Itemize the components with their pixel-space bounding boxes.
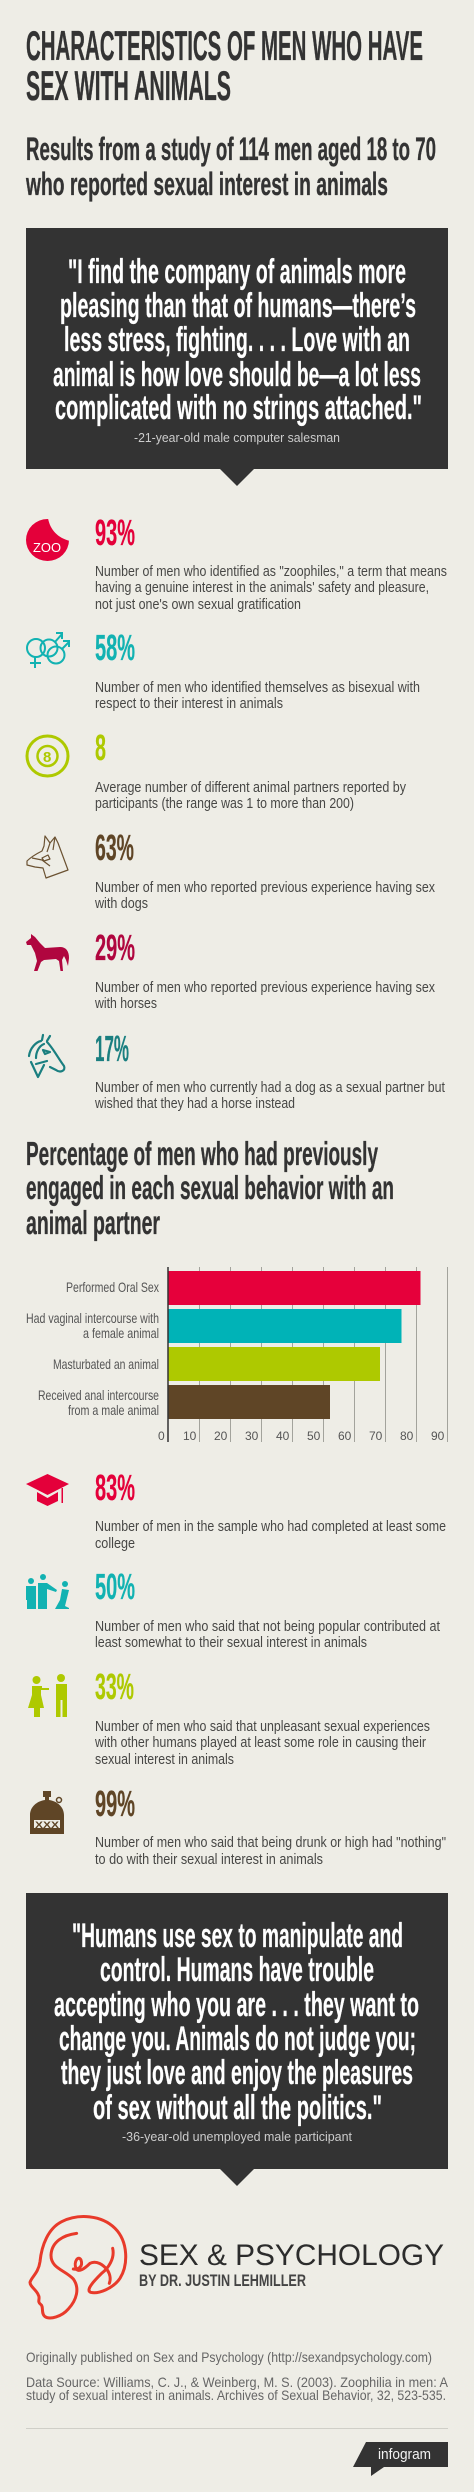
icon: dog head xyxy=(27,836,68,878)
stat: 33% unpleasant experiences: with other humans played at least some role in causing their xyxy=(94,1735,426,1751)
axis labels: 50 xyxy=(307,1429,321,1443)
icon: eight ball: 8 xyxy=(43,749,51,766)
heading: sexual behavior chart xyxy=(26,1135,394,1241)
bar: masturbated xyxy=(168,1347,380,1381)
axis labels: 10 xyxy=(183,1429,197,1443)
stat: 63% dogs xyxy=(27,827,436,912)
icon: eight ball xyxy=(27,736,68,776)
stat: 93% zoophiles: 93% xyxy=(95,512,135,553)
stat: 29% horses: with horses xyxy=(94,996,157,1012)
stat: 8 animal partners: participants (the range was 1 to more than 200) xyxy=(95,796,354,812)
axis labels: 20 xyxy=(214,1429,228,1443)
stat: 63% dogs: 63% xyxy=(95,827,134,868)
icon: moonshine jug: XXX xyxy=(35,1820,60,1831)
icon: moonshine jug xyxy=(30,1791,64,1834)
stat: 17% horse preference xyxy=(29,1028,445,1112)
icon: zoo badge: ZOO xyxy=(33,540,61,555)
stat: 50% not popular: least somewhat to their sexual interest in animals xyxy=(95,1635,367,1651)
category labels: Received anal intercourse xyxy=(38,1387,159,1403)
stat: 58% bisexual: Number of men who identified themselves as bisexual with xyxy=(95,680,420,696)
infogram badge xyxy=(353,2442,448,2476)
stat: 83% college: 83% xyxy=(95,1467,135,1508)
stat: 50% not popular: 50% xyxy=(95,1566,135,1607)
stat: 50% not popular xyxy=(26,1566,440,1651)
category labels xyxy=(26,1279,159,1418)
stat: 33% unpleasant experiences: sexual interest in animals xyxy=(95,1752,234,1768)
logo: Sex & Psychology xyxy=(30,2217,444,2318)
stat: 8 animal partners: 8 xyxy=(95,727,106,768)
stat: 58% bisexual xyxy=(27,627,420,712)
title xyxy=(26,22,423,109)
bar: performed oral sex xyxy=(168,1271,420,1305)
bar: vaginal intercourse xyxy=(168,1309,402,1343)
axis labels: 60 xyxy=(338,1429,352,1443)
category labels: a female animal xyxy=(83,1325,159,1341)
icon: gender symbols xyxy=(27,633,69,668)
axis labels: 30 xyxy=(245,1429,259,1443)
icon: people pointing xyxy=(26,1574,69,1609)
bar: anal intercourse xyxy=(168,1385,330,1419)
icon: horse head xyxy=(29,1035,64,1077)
category labels: Had vaginal intercourse with xyxy=(26,1310,159,1326)
stat: 83% college: college xyxy=(95,1536,135,1552)
bar chart xyxy=(26,1267,448,1443)
stat: 29% horses xyxy=(26,927,436,1012)
stat: 33% unpleasant experiences: 33% xyxy=(95,1666,134,1707)
icon: graduation cap xyxy=(26,1474,69,1506)
title: SEX WITH ANIMALS xyxy=(26,62,231,109)
stat: 29% horses: 29% xyxy=(95,927,135,968)
callout: second quote xyxy=(26,1893,448,2186)
stat: 99% drunk or high: to do with their sexual interest in animals xyxy=(95,1852,323,1868)
stat: 63% dogs: with dogs xyxy=(94,896,148,912)
icon: head with script xyxy=(30,2217,126,2318)
axis labels: 40 xyxy=(276,1429,290,1443)
stat: 17% horse preference: wished that they had a horse instead xyxy=(94,1096,295,1112)
axis labels: 80 xyxy=(400,1429,414,1443)
axis labels xyxy=(158,1429,445,1443)
stat: 58% bisexual: respect to their interest in animals xyxy=(95,696,283,712)
stat: 8 animal partners: Average number of different animal partners reported by xyxy=(95,780,407,796)
stat: 93% zoophiles: not just one's own sexual gratification xyxy=(95,597,301,613)
infogram badge: infogram xyxy=(378,2446,431,2463)
heading: sexual behavior chart: animal partner xyxy=(26,1204,160,1241)
stat: 58% bisexual: 58% xyxy=(95,627,135,668)
stat: 33% unpleasant experiences xyxy=(28,1666,430,1768)
axis labels: 0 xyxy=(158,1429,165,1443)
logo: Sex & Psychology: SEX & PSYCHOLOGY xyxy=(139,2239,444,2272)
stat: 99% drunk or high xyxy=(30,1783,446,1868)
stat: 83% college xyxy=(26,1467,446,1552)
stat: 8 animal partners xyxy=(27,727,407,812)
stat: 17% horse preference: 17% xyxy=(95,1028,129,1069)
stat: 99% drunk or high: 99% xyxy=(95,1783,135,1824)
axis labels: 90 xyxy=(431,1429,445,1443)
category labels: Performed Oral Sex xyxy=(66,1279,159,1295)
callout: first quote xyxy=(26,228,448,486)
icon: horse xyxy=(26,934,69,971)
logo: Sex & Psychology: BY DR. JUSTIN LEHMILLER xyxy=(139,2271,306,2290)
category labels: from a male animal xyxy=(68,1402,159,1418)
callout: first quote: -21-year-old male computer salesman xyxy=(134,430,340,445)
axis labels: 70 xyxy=(369,1429,383,1443)
icon: woman and man xyxy=(28,1674,67,1717)
callout: second quote: -36-year-old unemployed male participant xyxy=(122,2129,352,2144)
source notes xyxy=(26,2349,449,2403)
subtitle xyxy=(25,131,436,202)
stat: 93% zoophiles xyxy=(26,512,447,613)
icon: zoo badge xyxy=(26,518,70,561)
category labels: Masturbated an animal xyxy=(53,1356,159,1372)
